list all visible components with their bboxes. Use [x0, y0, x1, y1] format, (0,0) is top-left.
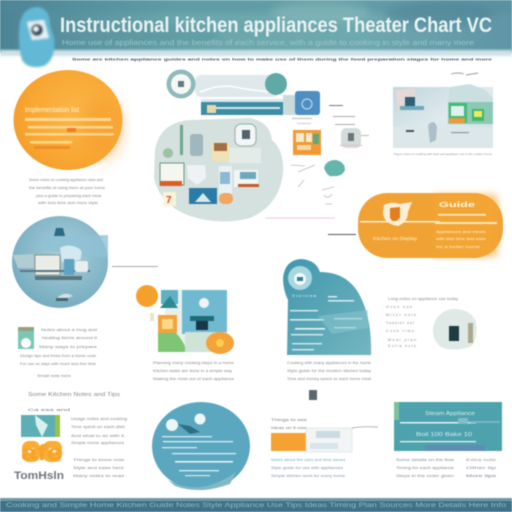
text block: beside lower left illustration [71, 417, 127, 478]
text block: list beside icon: Mixer note [386, 313, 416, 317]
label: top right panel [451, 73, 478, 75]
icon: orange circle [136, 285, 158, 307]
text block: below flow chart [396, 458, 496, 478]
panel: lower left illustration [14, 415, 64, 482]
text block: beside lower left illustration: And what to do with it [71, 434, 124, 438]
header banner [0, 0, 512, 67]
panel: central appliances circle [154, 118, 283, 222]
text block: list beside icon: Cook time [386, 329, 414, 333]
footer text: Cooking and Simple Home Kitchen Guide Notes Style Appliance Use Tips Ideas Timing Plan Sources More Details Here Info [6, 503, 507, 509]
text block: list beside icon: Extra note [388, 344, 416, 348]
panel: blue circle [12, 216, 108, 308]
caption: top right panel: Figure notes on cooking with style and appliance use in the modern home [394, 152, 492, 156]
text block: below flow chart: Some details on the flow [396, 458, 455, 462]
text block: orange circle [25, 118, 114, 149]
text block: below middle illustration: Making the most out of each appliance [153, 377, 234, 381]
sub-panel: green boxes [448, 84, 493, 124]
text block: below teal panel: Cooking with many appliances in the home [287, 361, 371, 365]
text block: below middle illustration: Kitchen tasks are done in a simple way [153, 369, 232, 373]
panel: orange circle [14, 70, 122, 170]
text block: below teal panel [287, 361, 371, 381]
text: emblem caption: Kitchen on Display [373, 236, 418, 241]
text block: below orange circle [29, 178, 105, 205]
text block: beside lower left illustration: Things to know now [73, 458, 125, 462]
label lines: beside teal blob [266, 165, 335, 218]
panel: teal flow chart [394, 402, 502, 451]
text block: list beside icon: Long notes on appliance use today [388, 297, 458, 301]
panel: blue text circle [152, 402, 250, 490]
text block: orange pill right [435, 202, 497, 249]
text block: orange pill right: for a better home [436, 245, 480, 249]
text block: orange pill right: with less time and ease [436, 237, 486, 241]
label lines: illustration side [150, 313, 154, 321]
panel: top right scene [393, 73, 493, 156]
text block: below orange circle: plus a guide to preparing each meal [36, 194, 101, 198]
text block: beside mug: For use on days with much less free time [20, 362, 96, 366]
icon: blue box [295, 91, 320, 115]
text block: below middle illustration [153, 361, 234, 381]
text block: below note card: Style guide for use with appliances [271, 466, 343, 470]
text block: orange pill right: Appliances and meals [436, 230, 486, 234]
text block: below orange circle: with less time and more style [38, 201, 98, 205]
text block: below middle illustration: Planning many cooking steps in a home [153, 361, 234, 365]
text block: below orange circle: the benefits of using them at your home [29, 186, 105, 190]
panel: orange note card: Ideas on it now [271, 426, 307, 430]
icon: green mug [18, 327, 34, 349]
panel: middle illustration [136, 285, 234, 354]
text block: teal panel: Overview [292, 294, 316, 298]
text block: beside mug: Many ways to prepare [39, 345, 97, 349]
text block: list beside icon: Meal plan [388, 338, 416, 342]
text block: below flow chart: Extra note [466, 458, 496, 462]
label: lower left small: Ca ess and [28, 407, 70, 412]
chart lines: Boil 100 Bake 10 [416, 432, 472, 438]
text block: beside mug [20, 328, 97, 378]
icon: teal circle [265, 73, 287, 95]
text block: beside lower left illustration: Many notes to read [73, 474, 124, 478]
text block: below flow chart: Timing for each appliance [396, 466, 454, 470]
text block: beside mug: Small note here [37, 374, 71, 378]
icon: white bubbles [166, 414, 206, 434]
text block: below note card [271, 458, 345, 478]
chart lines [400, 411, 500, 442]
panel: orange note card [271, 418, 378, 452]
text: orange letters: afe [21, 440, 63, 465]
icon: top left circle [166, 70, 196, 98]
text: lower left name: TomHsln [14, 470, 64, 482]
icon: orange calendar [293, 130, 321, 155]
icon: header logo [19, 7, 54, 67]
panel: teal info shape [283, 259, 371, 355]
footer bar [0, 498, 512, 512]
text block: below teal panel: Time and money saved on each home meal [287, 377, 371, 381]
text block: beside lower left illustration: Time spent on each dish [71, 425, 125, 429]
connector line: blue circle [112, 266, 158, 267]
icon: small document [309, 390, 317, 400]
icon: gray appliance blob [433, 309, 476, 350]
text block: beside mug: heating items around it [42, 336, 97, 340]
text block: beside mug: Design tips and tricks from a home cook [20, 354, 96, 358]
text block: below flow chart: More tips [466, 474, 496, 478]
icon: appliance cluster: 7 [166, 195, 172, 206]
text block: below flow chart: Steps in the order given [396, 474, 454, 478]
icon: gray appliance [340, 128, 369, 148]
heading: orange circle: Implementation list [25, 107, 79, 114]
label: orange pill [328, 234, 356, 235]
chart lines: Steam Appliance [425, 411, 475, 417]
divider line [360, 221, 440, 222]
text block: below note card: Notes about the card and time saved [271, 458, 345, 462]
icon: teal blob [324, 160, 345, 176]
text block: below note card: Simple kitchen work for every home [271, 474, 345, 478]
icon: laptop scene [13, 228, 108, 301]
label lines: centre column [292, 105, 355, 125]
text block: list beside icon: Oven use [386, 305, 412, 309]
text block: beside lower left illustration: Style and ease here [73, 466, 124, 470]
text block: beside lower left illustration: Simple home appliances [71, 441, 124, 445]
text block: lower left heading: Some Kitchen Notes and Tips [28, 392, 121, 398]
text block: orange pill right: Guide [439, 202, 475, 209]
text block: list beside icon [386, 297, 458, 348]
icon: white emblem [383, 202, 412, 226]
icon: teal panel badge [288, 266, 312, 290]
text block: circle lines [162, 436, 236, 476]
header strip caption: Some are kitchen appliance guides and notes on how to make use of them during the food preparation stages for home and more [72, 58, 492, 62]
text block: below flow chart: Other tip [466, 466, 496, 470]
panel: top bar with circle icon [166, 70, 320, 115]
text block: beside lower left illustration: Usage notes and cooking [71, 417, 127, 421]
text block: list beside icon: Toaster set [386, 321, 414, 325]
text block: beside mug: Notes about a mug and [41, 328, 97, 332]
panel: orange pill [358, 193, 503, 258]
text block: below teal panel: Style guide for the modern kitchen today [287, 369, 371, 373]
text block: below orange circle: Some notes on cooking appliance uses and [29, 178, 103, 182]
panel: orange note card: Things to see [271, 418, 307, 422]
teal bar [201, 99, 283, 115]
subtitle: Home use of appliances and the benefits of each service, with a guide to cooking in style and many more [62, 40, 474, 47]
